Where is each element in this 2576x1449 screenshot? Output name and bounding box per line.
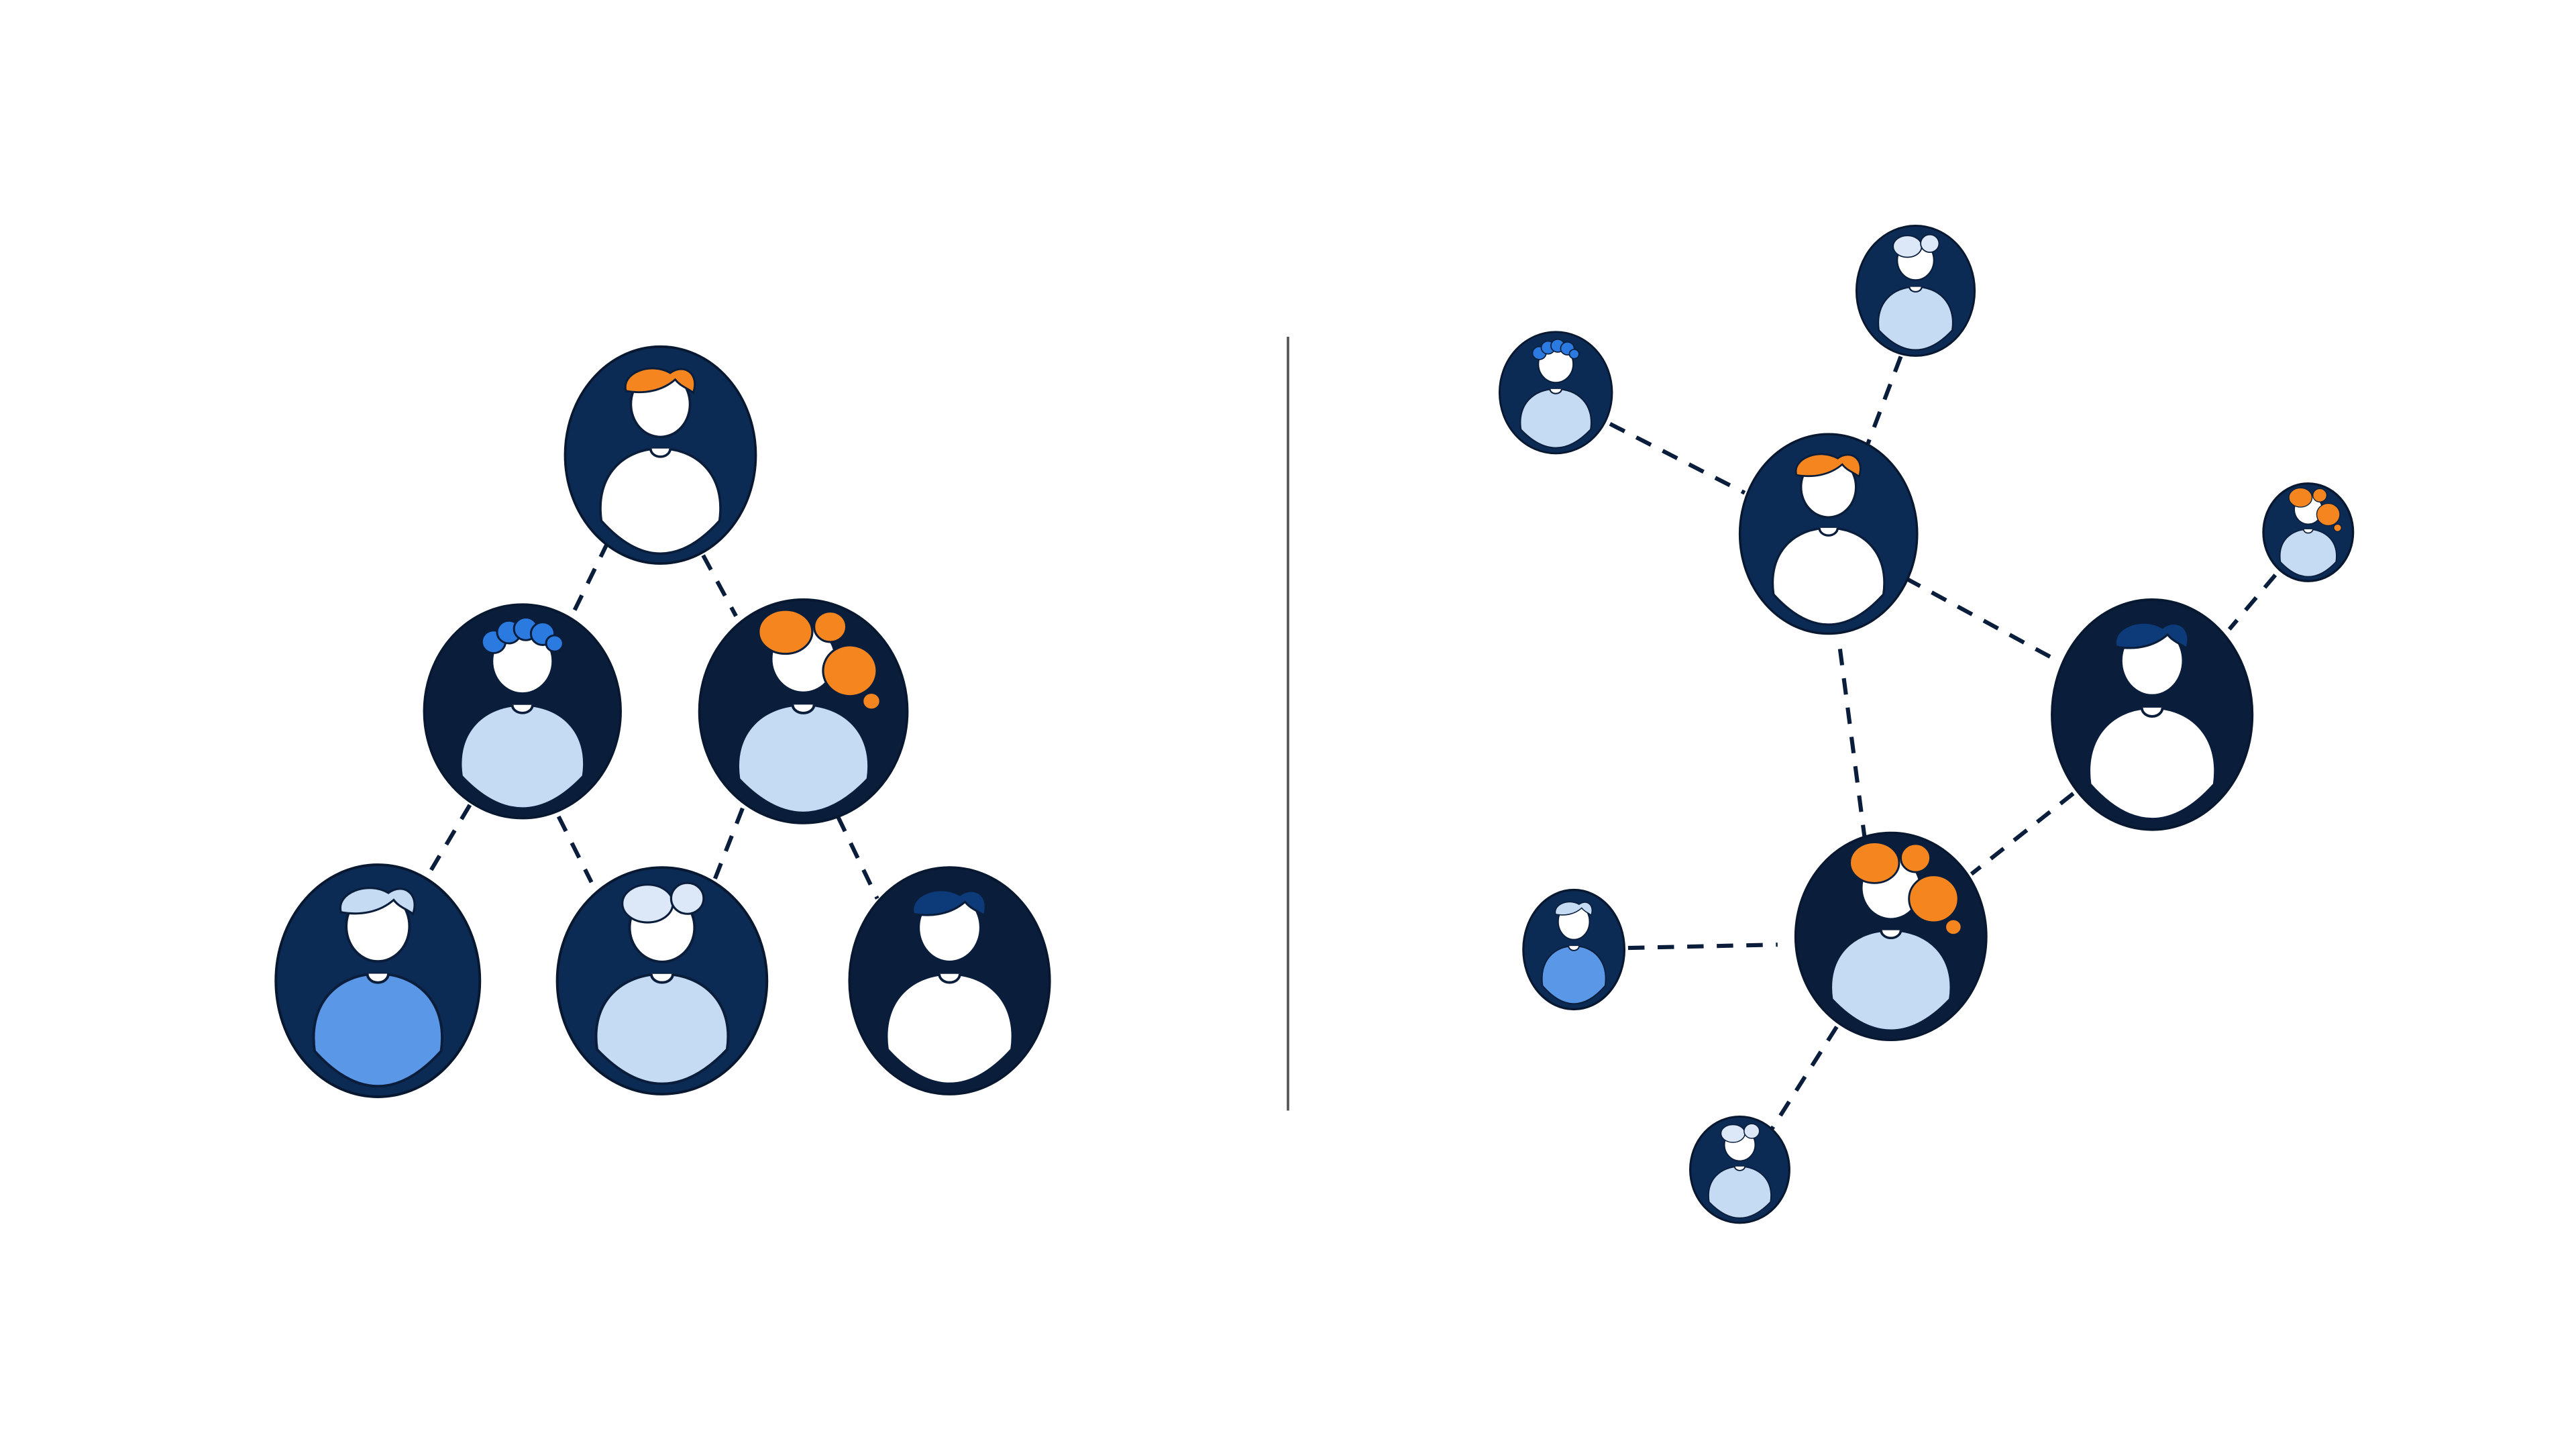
dashed connections: hierarchy <box>424 542 877 899</box>
avatar: network small blue hair <box>1499 332 1612 453</box>
avatar: network bottom small <box>1690 1116 1789 1223</box>
avatar: network hub orange <box>1740 434 1917 634</box>
avatar: hierarchy mid right <box>700 600 907 823</box>
avatar: hierarchy bottom 1 <box>276 865 480 1097</box>
avatar: network small orange curls <box>2263 484 2353 581</box>
dashed connections: network <box>1610 356 2275 1130</box>
avatar: hierarchy bottom 3 <box>849 867 1050 1094</box>
divider <box>1287 337 1289 1111</box>
avatar: network center orange curls <box>1796 833 1986 1040</box>
avatar: network top bun <box>1856 225 1975 356</box>
avatar: hierarchy top <box>565 347 756 564</box>
avatar: hierarchy mid left <box>424 604 621 818</box>
avatar: network right navy hair <box>2052 600 2252 830</box>
avatar: hierarchy bottom 2 <box>557 867 767 1094</box>
avatar: network left small <box>1523 890 1624 1009</box>
